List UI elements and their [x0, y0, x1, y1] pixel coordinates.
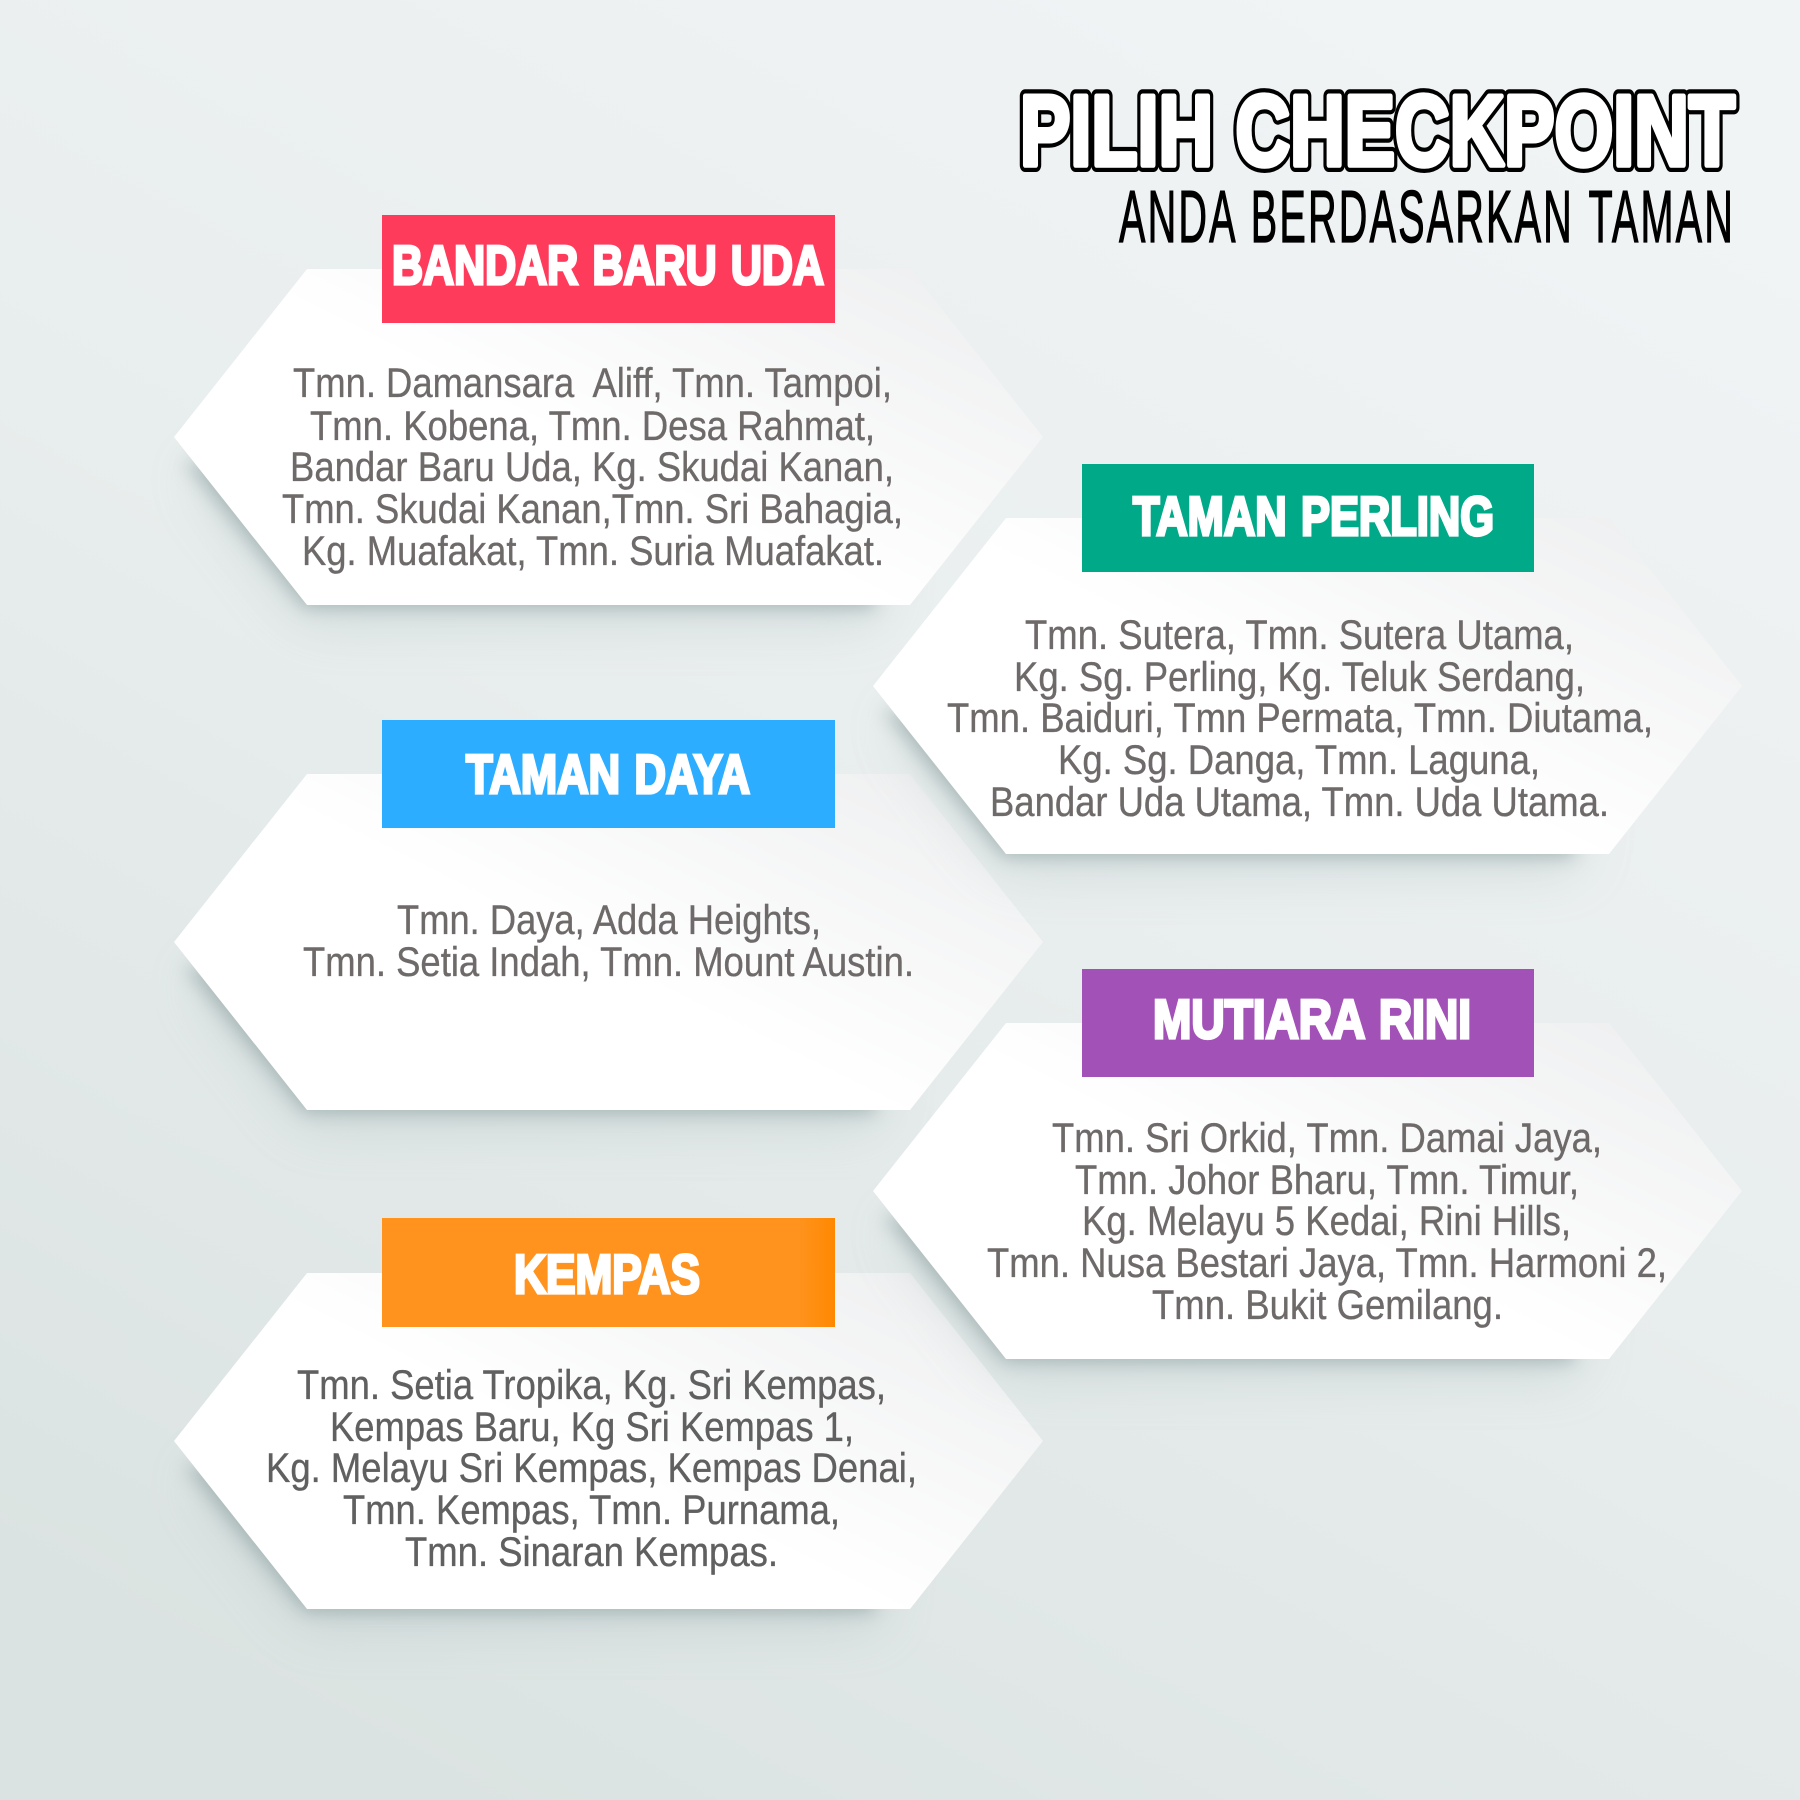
panel: Taman Perling — [873, 464, 1742, 869]
place list: Bandar Uda Utama, Tmn. Uda Utama. — [990, 778, 1609, 825]
place list — [266, 1361, 917, 1575]
hexagon — [873, 1023, 1742, 1359]
panel: Mutiara Rini — [873, 969, 1742, 1374]
place list: Tmn. Kempas, Tmn. Purnama, — [343, 1486, 840, 1533]
place list: Tmn. Baiduri, Tmn Permata, Tmn. Diutama, — [947, 694, 1653, 741]
place list: Kg. Melayu 5 Kedai, Rini Hills, — [1082, 1197, 1571, 1244]
banner — [1082, 969, 1534, 1077]
panel: Taman Daya — [174, 720, 1043, 1125]
place list: Kempas Baru, Kg Sri Kempas 1, — [330, 1403, 854, 1450]
panel: Bandar Baru Uda — [174, 215, 1043, 620]
hexagon — [873, 518, 1742, 854]
hexagon — [174, 1273, 1043, 1609]
place list — [987, 1114, 1667, 1328]
banner — [382, 720, 835, 828]
banner — [1082, 464, 1534, 572]
place list: Tmn. Skudai Kanan,Tmn. Sri Bahagia, — [282, 485, 903, 532]
place list: Tmn. Damansara Aliff, Tmn. Tampoi, — [293, 359, 892, 406]
place list: Kg. Sg. Danga, Tmn. Laguna, — [1058, 736, 1540, 783]
heading: BANDAR BARU UDA — [392, 234, 824, 296]
place list: Tmn. Setia Indah, Tmn. Mount Austin. — [303, 938, 914, 985]
place list: Kg. Muafakat, Tmn. Suria Muafakat. — [302, 527, 884, 574]
place list — [947, 611, 1653, 825]
banner — [382, 215, 835, 323]
place list: Tmn. Nusa Bestari Jaya, Tmn. Harmoni 2, — [987, 1239, 1667, 1286]
place list: Tmn. Sri Orkid, Tmn. Damai Jaya, — [1052, 1114, 1602, 1161]
place list: Tmn. Kobena, Tmn. Desa Rahmat, — [310, 402, 875, 449]
heading: TAMAN DAYA — [466, 743, 750, 805]
place list: Tmn. Johor Bharu, Tmn. Timur, — [1075, 1156, 1579, 1203]
panel: Kempas — [174, 1218, 1043, 1624]
place list — [303, 896, 914, 985]
heading: TAMAN PERLING — [1133, 485, 1494, 547]
place list: Kg. Melayu Sri Kempas, Kempas Denai, — [266, 1444, 917, 1491]
heading: MUTIARA RINI — [1153, 988, 1471, 1050]
place list: Tmn. Setia Tropika, Kg. Sri Kempas, — [297, 1361, 886, 1408]
place list: Tmn. Sinaran Kempas. — [405, 1528, 778, 1575]
place list — [282, 359, 903, 574]
place list: Kg. Sg. Perling, Kg. Teluk Serdang, — [1014, 653, 1585, 700]
heading: KEMPAS — [514, 1243, 700, 1305]
banner — [382, 1218, 835, 1327]
hexagon — [174, 269, 1043, 605]
hexagon — [174, 774, 1043, 1110]
place list: Tmn. Sutera, Tmn. Sutera Utama, — [1025, 611, 1574, 658]
place list: Tmn. Daya, Adda Heights, — [397, 896, 821, 943]
place list: Tmn. Bukit Gemilang. — [1152, 1281, 1503, 1328]
place list: Bandar Baru Uda, Kg. Skudai Kanan, — [290, 443, 894, 490]
